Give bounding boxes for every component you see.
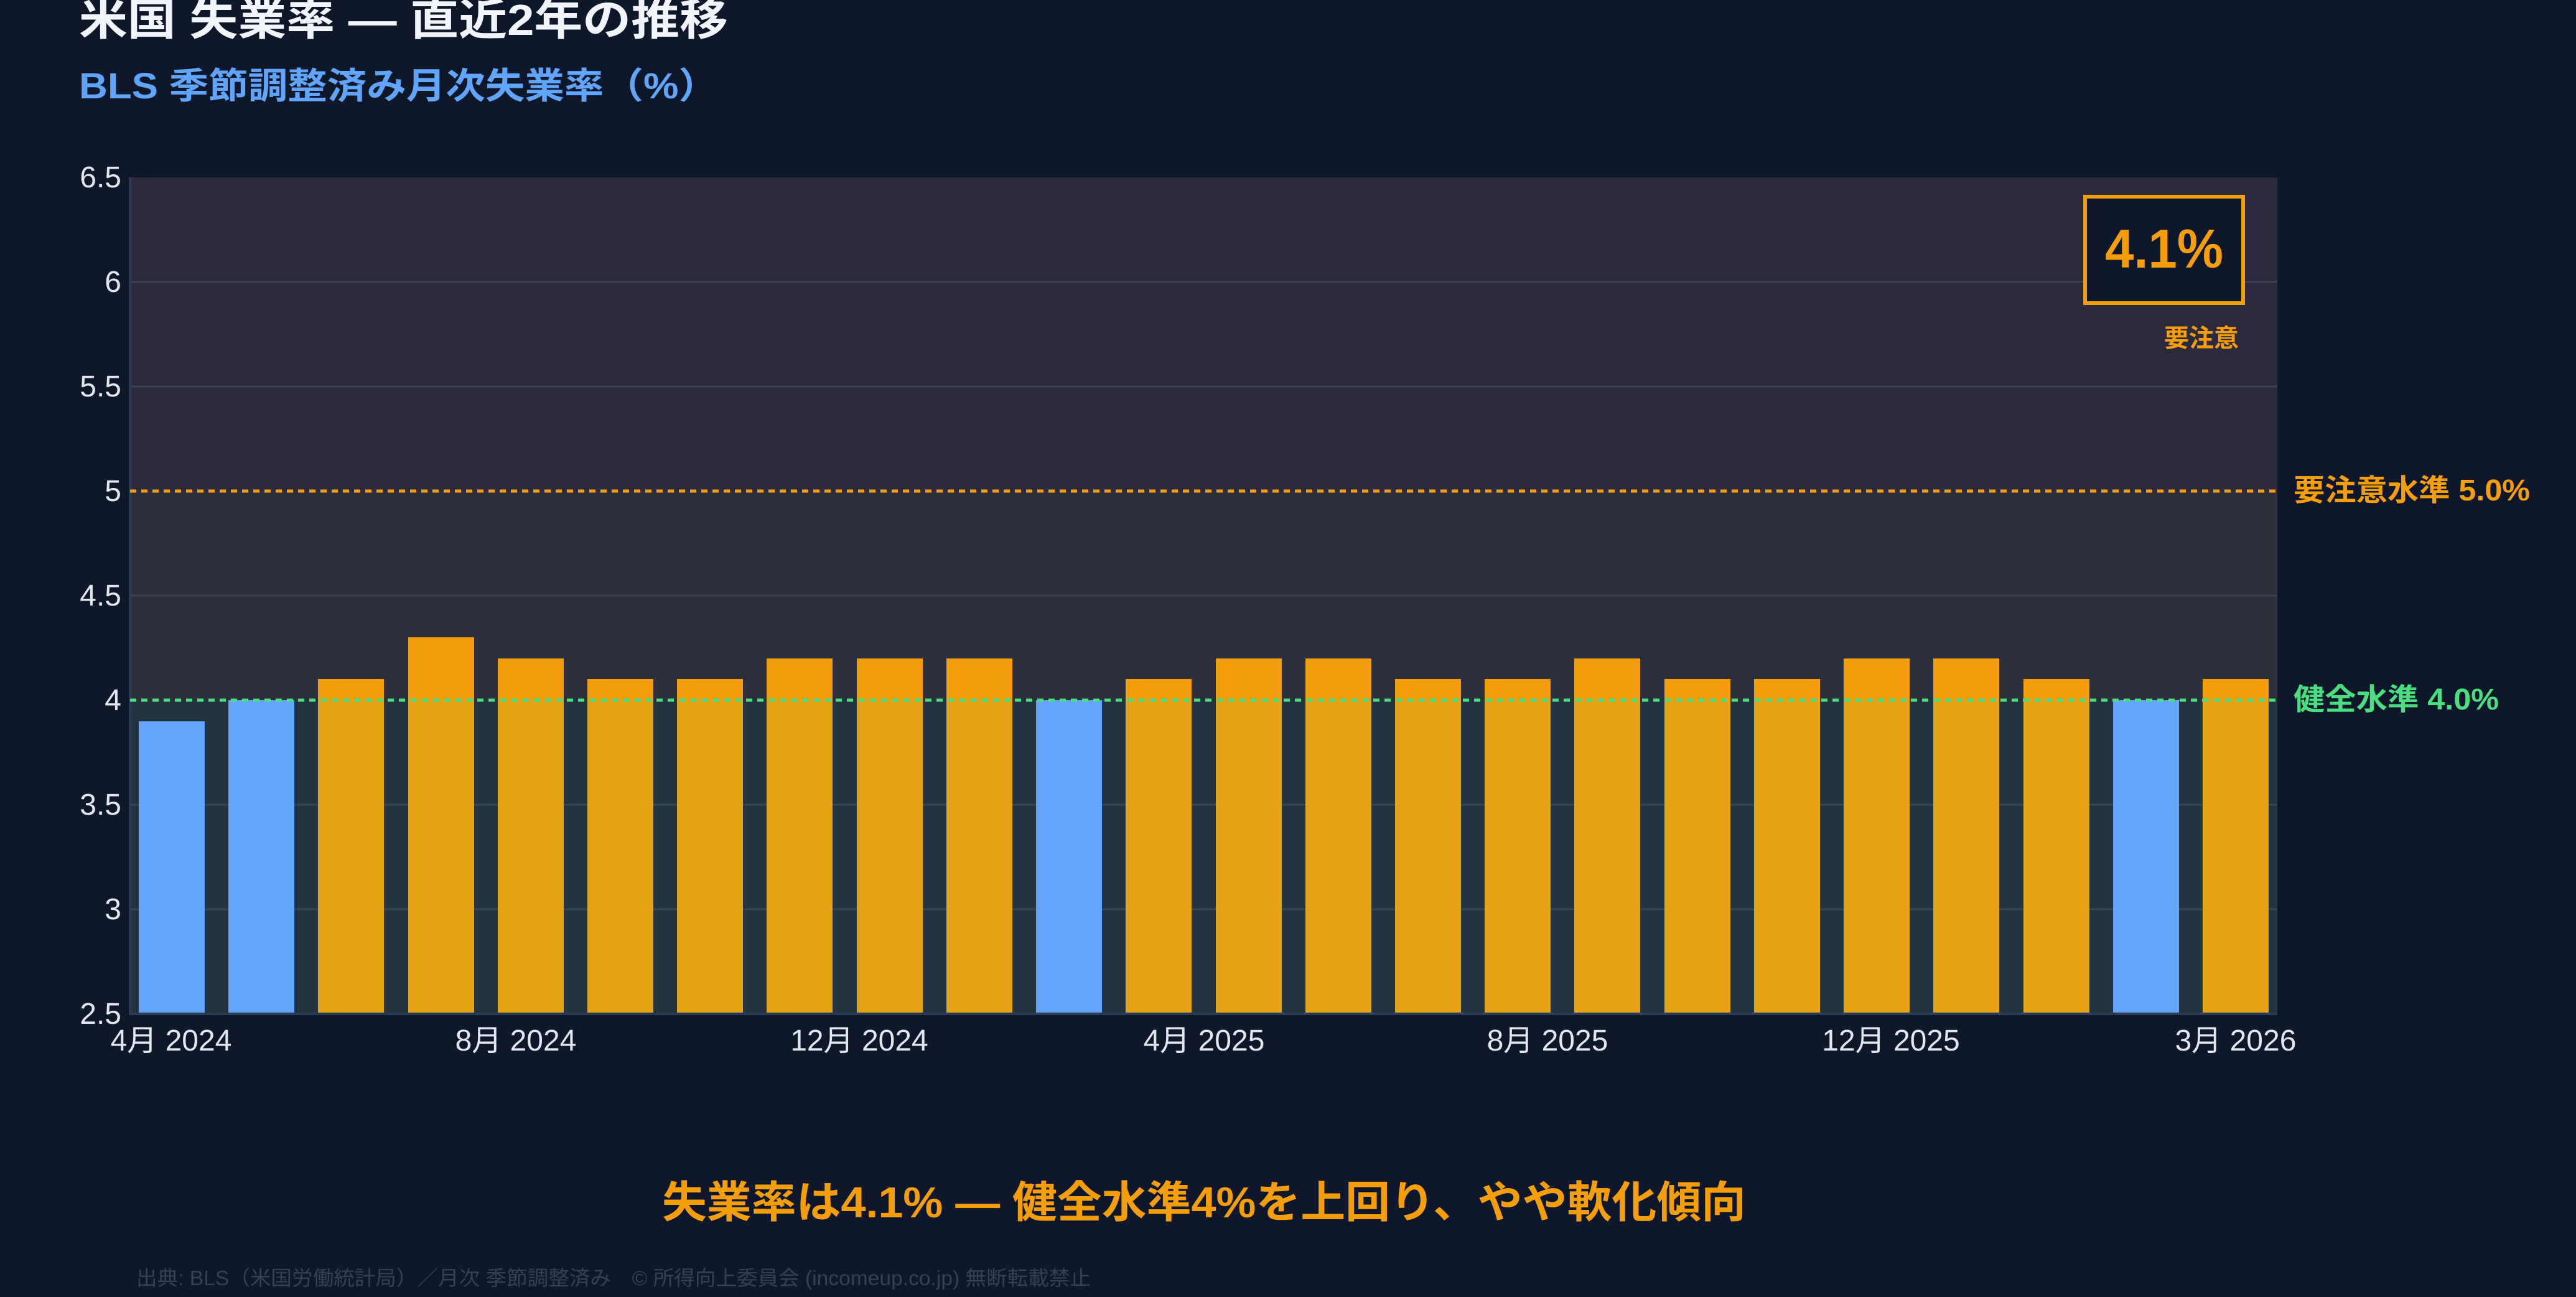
x axis labels: 3月 2026 bbox=[2175, 1024, 2296, 1057]
x axis labels: 4月 2024 bbox=[111, 1024, 231, 1057]
x axis labels: 12月 2025 bbox=[1822, 1024, 1960, 1057]
label: healthy level: 健全水準 4.0% bbox=[2294, 683, 2499, 716]
callout: current value: 要注意 bbox=[2164, 325, 2239, 352]
footer source: 出典: BLS（米国労働統計局）／月次 季節調整済み © 所得向上委員会 (incomeup.co.jp) 無断転載禁止 bbox=[136, 1267, 1091, 1290]
x axis labels: 12月 2024 bbox=[790, 1024, 928, 1057]
y axis labels: 5.5 bbox=[80, 370, 121, 403]
x axis labels bbox=[111, 1024, 2296, 1057]
y axis labels: 4.5 bbox=[80, 579, 121, 612]
bars bbox=[139, 637, 2269, 1014]
callout: current value bbox=[2085, 197, 2243, 352]
y axis labels: 3.5 bbox=[80, 789, 121, 822]
x axis labels: 8月 2025 bbox=[1487, 1024, 1608, 1057]
y axis labels bbox=[80, 161, 121, 1031]
callout: current value: 4.1% bbox=[2105, 218, 2223, 279]
y axis labels: 6 bbox=[105, 266, 121, 299]
x axis labels: 8月 2024 bbox=[455, 1024, 576, 1057]
summary message: 失業率は4.1% — 健全水準4%を上回り、やや軟化傾向 bbox=[662, 1178, 1746, 1227]
y axis labels: 2.5 bbox=[80, 998, 121, 1031]
y axis labels: 6.5 bbox=[80, 161, 121, 194]
y axis labels: 4 bbox=[105, 684, 121, 717]
y axis labels: 3 bbox=[105, 893, 121, 926]
warning line 5.0 bbox=[130, 489, 2277, 493]
healthy line 4.0 bbox=[130, 698, 2277, 702]
label: warning level: 要注意水準 5.0% bbox=[2294, 474, 2530, 507]
y axis labels: 5 bbox=[105, 475, 121, 508]
chart bbox=[80, 161, 2296, 1057]
subtitle: BLS 季節調整済み月次失業率（%） bbox=[79, 66, 718, 106]
background bands bbox=[130, 177, 2277, 1014]
x axis labels: 4月 2025 bbox=[1144, 1024, 1264, 1057]
